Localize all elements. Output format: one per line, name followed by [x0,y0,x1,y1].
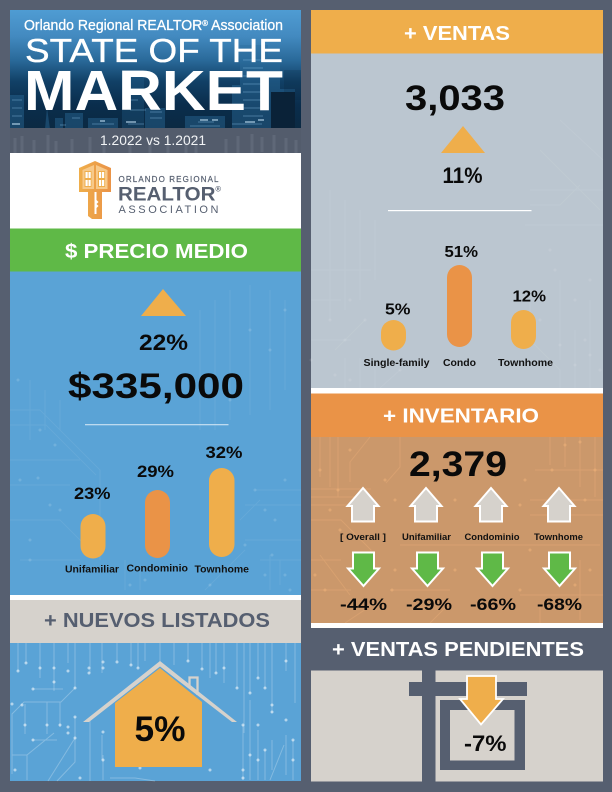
icon: up triangle [441,126,485,153]
logo text main: REALTOR [118,184,208,206]
title line 2: MARKET [24,59,283,123]
organisation line: Orlando Regional REALTOR [24,18,208,34]
bar: townhome: 32% [206,443,242,462]
date range: 1.2022 vs 1.2021 [100,132,206,148]
panel heading: ventas: + VENTAS [404,23,510,45]
panel heading: nuevos listados: + NUEVOS LISTADOS [44,610,270,632]
column: condominio: Condominio [464,532,520,543]
bar: condo: Condo [443,358,476,369]
bar: condo: 51% [444,244,478,261]
headline value: 3,033 [405,79,505,118]
median price: $335,000 [68,367,244,406]
column: townhome [534,488,583,614]
column: overall [340,488,387,614]
bar: condo [443,244,478,369]
bar: unifamiliar [65,484,119,576]
panel heading: nuevos listados [10,600,301,643]
bar: townhome: 12% [512,288,546,306]
panel heading: inventario: + INVENTARIO [383,406,539,428]
title line 1: STATE OF THE [25,32,283,69]
panel: header [10,10,301,153]
logo text main: ® [215,186,222,194]
circuit pattern [311,120,603,388]
percent change: -7% [464,731,506,756]
column: overall: [ Overall ] [340,532,386,543]
icon: up triangle [141,289,186,316]
bar: townhome [194,443,249,576]
circuit pattern [12,643,295,781]
column: townhome: Townhome [534,532,583,543]
organisation line: Association [208,18,283,34]
city skyline [10,45,301,129]
icon: house: 5% [134,710,186,749]
bar: townhome: Townhome [498,358,553,369]
panel: ventas pendientes [311,639,603,782]
bar: unifamiliar: 23% [74,484,110,503]
panel heading: ventas pendientes: + VENTAS PENDIENTES [332,639,584,661]
column: condominio: -66% [470,595,516,614]
bar: single-family: 5% [385,302,410,318]
icon: house key [79,161,111,219]
panel: ventas [311,53,603,389]
logo text bottom: ASSOCIATION [118,204,219,216]
panel: inventario [311,388,603,628]
panel heading: inventario [311,394,603,437]
bar: condominio: 29% [137,462,174,481]
bar: single-family: Single-family [364,358,430,369]
bar: townhome [498,288,553,369]
column: unifamiliar: -29% [406,595,452,614]
bar: single-family [364,302,430,369]
bar chart: precio medio [65,443,249,576]
logo text top: ORLANDO REGIONAL [118,175,219,184]
panel heading: ventas [311,10,603,54]
percent change: 22% [139,330,188,355]
bar: townhome: Townhome [194,564,249,576]
bar: condominio: Condominio [126,564,188,574]
road sign graphic [409,670,527,782]
bar: unifamiliar: Unifamiliar [65,564,119,576]
column: unifamiliar: Unifamiliar [402,532,451,543]
percent change: 11% [442,163,482,188]
icon: down arrow [460,676,503,724]
circuit pattern [10,285,301,590]
column: townhome: -68% [537,595,582,614]
column: condominio [464,488,520,614]
bar chart: ventas [364,244,553,369]
organisation line: ® [202,19,208,28]
panel: logo [10,153,301,229]
column: overall: -44% [340,595,387,614]
panel heading: precio medio: $ PRECIO MEDIO [65,241,248,263]
icon: house [83,661,237,767]
headline value: 2,379 [409,445,507,484]
panel: precio medio [10,271,301,596]
panel heading: precio medio [10,228,301,272]
reflection band [10,128,301,153]
panel: nuevos listados [10,595,301,781]
column: unifamiliar [402,488,452,614]
bar: condominio [126,462,188,574]
circuit pattern [311,437,603,623]
